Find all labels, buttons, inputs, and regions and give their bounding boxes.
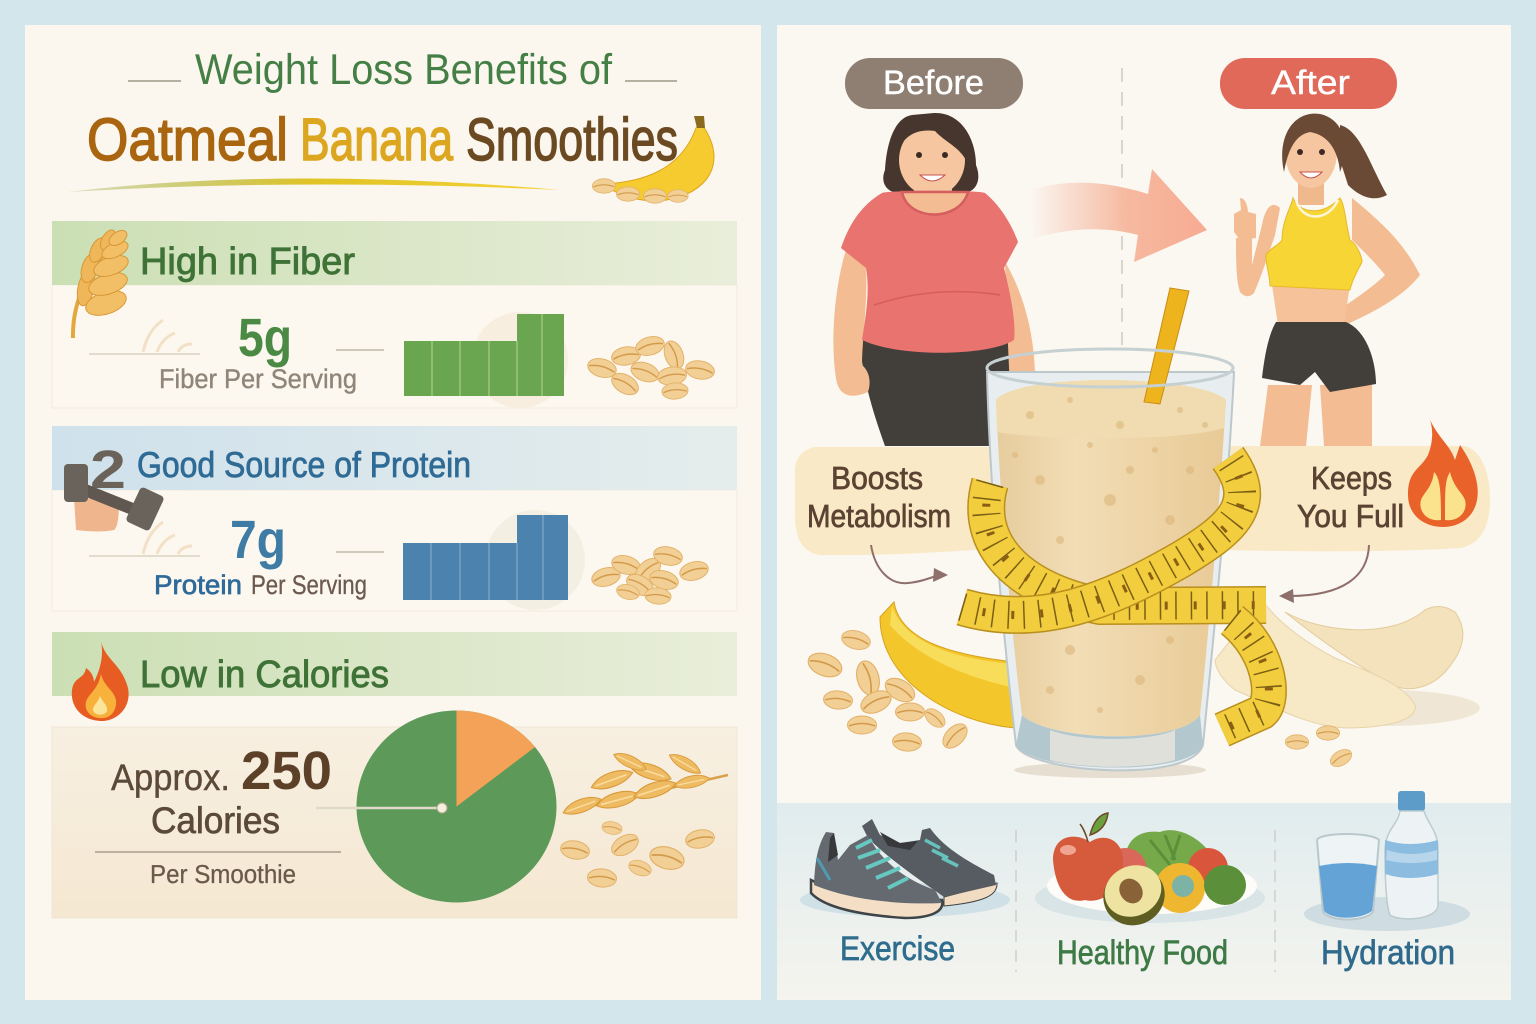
icon: oats [590, 544, 710, 605]
stat: 7g protein: 7g [230, 510, 286, 570]
panel: benefits [25, 25, 761, 1000]
callout: keeps you full: You Full [1297, 498, 1404, 534]
stat: 7g protein: Protein [154, 570, 242, 600]
badge: before: Before [883, 64, 984, 102]
bar chart: fiber [404, 312, 568, 408]
bar chart: protein [403, 510, 585, 610]
illustration: measuring tape [962, 458, 1269, 730]
heading: low in calories: Low in Calories [140, 654, 389, 696]
illustration: loose oats [805, 628, 1355, 770]
label: hydration: Hydration [1321, 934, 1455, 972]
icon: arm with dumbbell [64, 440, 165, 532]
panel: high in fiber [52, 221, 737, 408]
icon: oat sprig and flakes [559, 749, 728, 888]
callout: boosts metabolism [795, 447, 1000, 583]
label: healthy food: Healthy Food [1057, 934, 1228, 972]
badge: before [845, 58, 1023, 109]
title: Oatmeal [87, 106, 288, 173]
title: Smoothies [466, 106, 678, 173]
badge: after: After [1271, 64, 1350, 102]
figure: before woman [833, 113, 1035, 446]
heading: high in fiber: High in Fiber [140, 241, 355, 283]
stat: 5g fiber: 5g [238, 308, 292, 368]
stat: 7g protein [89, 510, 384, 600]
pie chart: calories [316, 710, 556, 902]
icon: banana and nuts [592, 116, 714, 203]
illustration: smoothie glass [987, 288, 1234, 778]
stat: 5g fiber [89, 308, 384, 394]
stat: approx 250 calories: Approx. [111, 757, 230, 798]
arrow: before to after [1030, 169, 1207, 262]
panel: good source of protein [52, 426, 737, 611]
figure: after woman [1234, 114, 1420, 446]
title: Banana [300, 106, 453, 173]
icon: flame with stomach [1408, 420, 1478, 527]
icon: water glass and bottle [1304, 791, 1470, 931]
illustration: bananas [880, 600, 1480, 728]
badge: after [1220, 58, 1397, 109]
stat: approx 250 calories: Calories [151, 800, 280, 841]
panel: low in calories [52, 632, 737, 918]
callout: keeps you full [1225, 446, 1490, 603]
panel: before and after [777, 25, 1511, 1000]
icon: arm with dumbbell: 2 [90, 440, 126, 500]
callout: boosts metabolism: Boosts [831, 460, 923, 496]
icon: running shoes [800, 819, 1010, 918]
icon: oats [586, 334, 716, 400]
callout: boosts metabolism: Metabolism [807, 498, 951, 534]
stat: 5g fiber: Fiber Per Serving [159, 364, 357, 394]
stat: approx 250 calories: 250 [241, 741, 332, 801]
panel: healthy habits [777, 791, 1511, 1000]
stat: approx 250 calories: Per Smoothie [150, 859, 296, 889]
stat: 7g protein: Per Serving [251, 570, 367, 600]
icon: flame [72, 641, 129, 721]
stat: approx 250 calories [95, 741, 341, 889]
title: Weight Loss Benefits of [195, 46, 613, 94]
icon: wheat [73, 227, 131, 338]
label: exercise: Exercise [840, 930, 955, 968]
heading: protein: Good Source of Protein [137, 444, 471, 485]
callout: keeps you full: Keeps [1311, 460, 1392, 496]
icon: plate of healthy food [1035, 813, 1265, 935]
title [68, 46, 678, 192]
